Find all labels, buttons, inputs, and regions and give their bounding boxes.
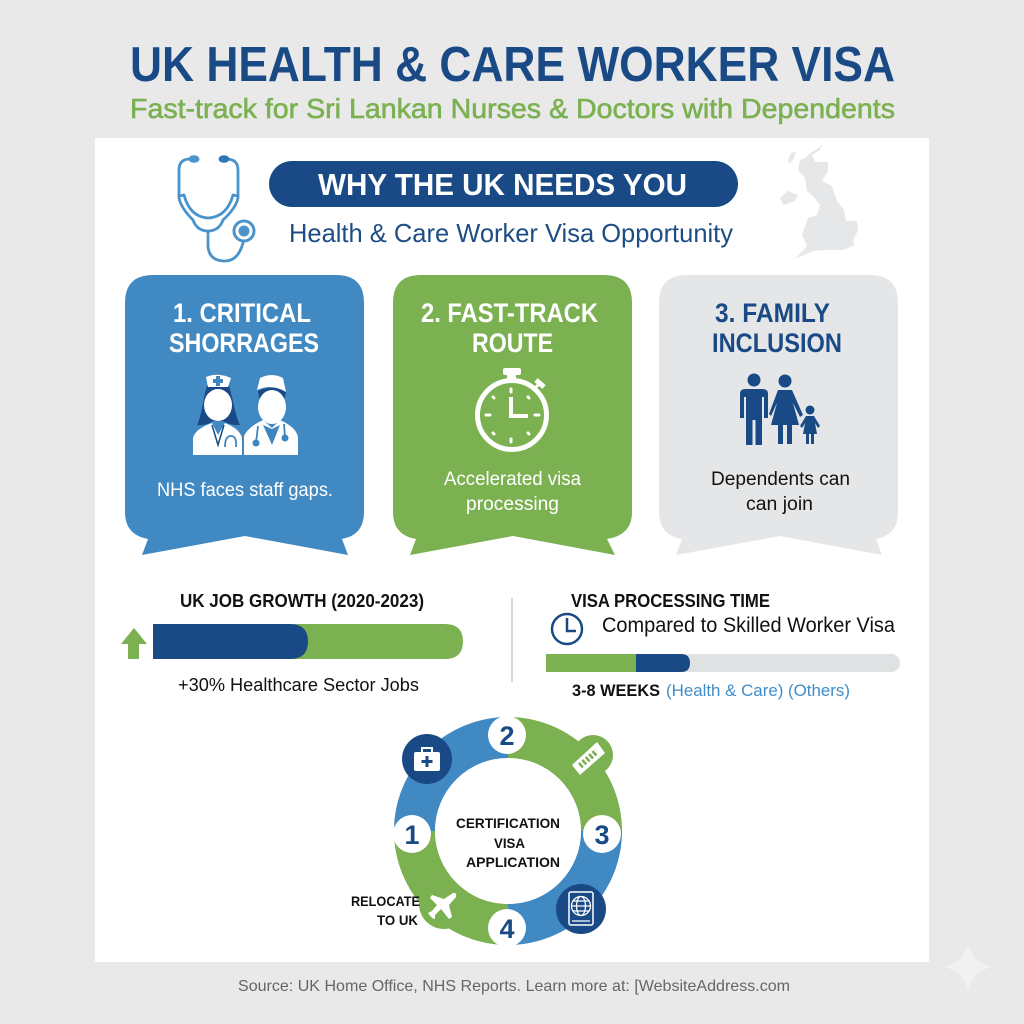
heading line two: SHORRAGES xyxy=(169,328,319,358)
subtitle: Fast-track for Sri Lankan Nurses & Doctors with Dependents xyxy=(130,93,895,124)
heading: fast-track: 2. FAST-TRACK xyxy=(421,298,598,328)
icon: plane xyxy=(419,879,469,929)
comparison text: Compared to Skilled Worker Visa xyxy=(602,614,895,637)
step 3: 3 xyxy=(594,820,610,850)
icon: up arrow xyxy=(121,628,147,659)
step 1: 1 xyxy=(404,820,420,850)
icon: family xyxy=(740,374,820,445)
ring segments xyxy=(414,738,602,925)
icon: certificate xyxy=(572,735,613,775)
icon: nurse and doctor xyxy=(193,375,298,455)
icon: medical case xyxy=(402,734,452,784)
chart heading: VISA PROCESSING TIME xyxy=(571,591,770,611)
heading: critical shortages: 1. CRITICAL xyxy=(173,298,311,328)
heading line two: ROUTE xyxy=(472,328,553,358)
icon: sparkle xyxy=(944,943,992,992)
icon: stopwatch xyxy=(478,368,546,450)
banner subtitle: Health & Care Worker Visa Opportunity xyxy=(289,218,733,248)
chart: UK job growth xyxy=(121,591,463,695)
heading banner: WHY THE UK NEEDS YOU xyxy=(318,167,687,202)
weeks label: 3-8 WEEKS xyxy=(572,681,660,700)
text: accelerated: Accelerated visa xyxy=(444,469,581,490)
icon: UK map xyxy=(780,143,858,259)
heading banner xyxy=(269,161,738,207)
centre hub xyxy=(435,758,581,904)
hub text: application: APPLICATION xyxy=(466,854,560,870)
growth bar xyxy=(153,624,463,659)
step 4: 4 xyxy=(499,914,515,944)
icon: clock xyxy=(552,614,582,644)
hub text: certification: CERTIFICATION xyxy=(456,815,560,831)
icon: stethoscope xyxy=(179,155,254,261)
panel: fast-track route xyxy=(393,275,632,555)
text: dependents: Dependents can xyxy=(711,469,850,490)
panel: family inclusion xyxy=(659,275,898,555)
source footer: Source: UK Home Office, NHS Reports. Learn more at: [WebsiteAddress.com xyxy=(238,978,790,995)
icon: passport xyxy=(556,884,606,934)
heading: family: 3. FAMILY xyxy=(715,298,830,328)
label: relocate: RELOCATE xyxy=(351,893,420,909)
step 2 xyxy=(488,716,526,754)
processing bar xyxy=(546,654,900,672)
panel: critical shortages xyxy=(125,275,364,555)
step 2: 2 xyxy=(499,721,515,751)
text: processing: processing xyxy=(466,494,559,515)
step 1 xyxy=(393,815,431,853)
title: UK HEALTH & CARE WORKER VISA xyxy=(130,38,895,92)
chart heading: UK JOB GROWTH (2020-2023) xyxy=(180,591,424,611)
text: can join: can join xyxy=(746,494,813,515)
legend labels: (Health & Care) (Others) xyxy=(666,681,850,700)
growth label: +30% Healthcare Sector Jobs xyxy=(178,675,419,695)
hub text: visa: VISA xyxy=(494,835,525,851)
step 3 xyxy=(583,815,621,853)
process cycle diagram xyxy=(351,716,621,947)
main white panel xyxy=(95,138,929,962)
text: staff gaps: NHS faces staff gaps. xyxy=(157,480,333,501)
step 4 xyxy=(488,909,526,947)
label: to UK: TO UK xyxy=(377,912,418,928)
chart: visa processing time xyxy=(546,591,900,700)
heading line two: INCLUSION xyxy=(712,328,842,358)
